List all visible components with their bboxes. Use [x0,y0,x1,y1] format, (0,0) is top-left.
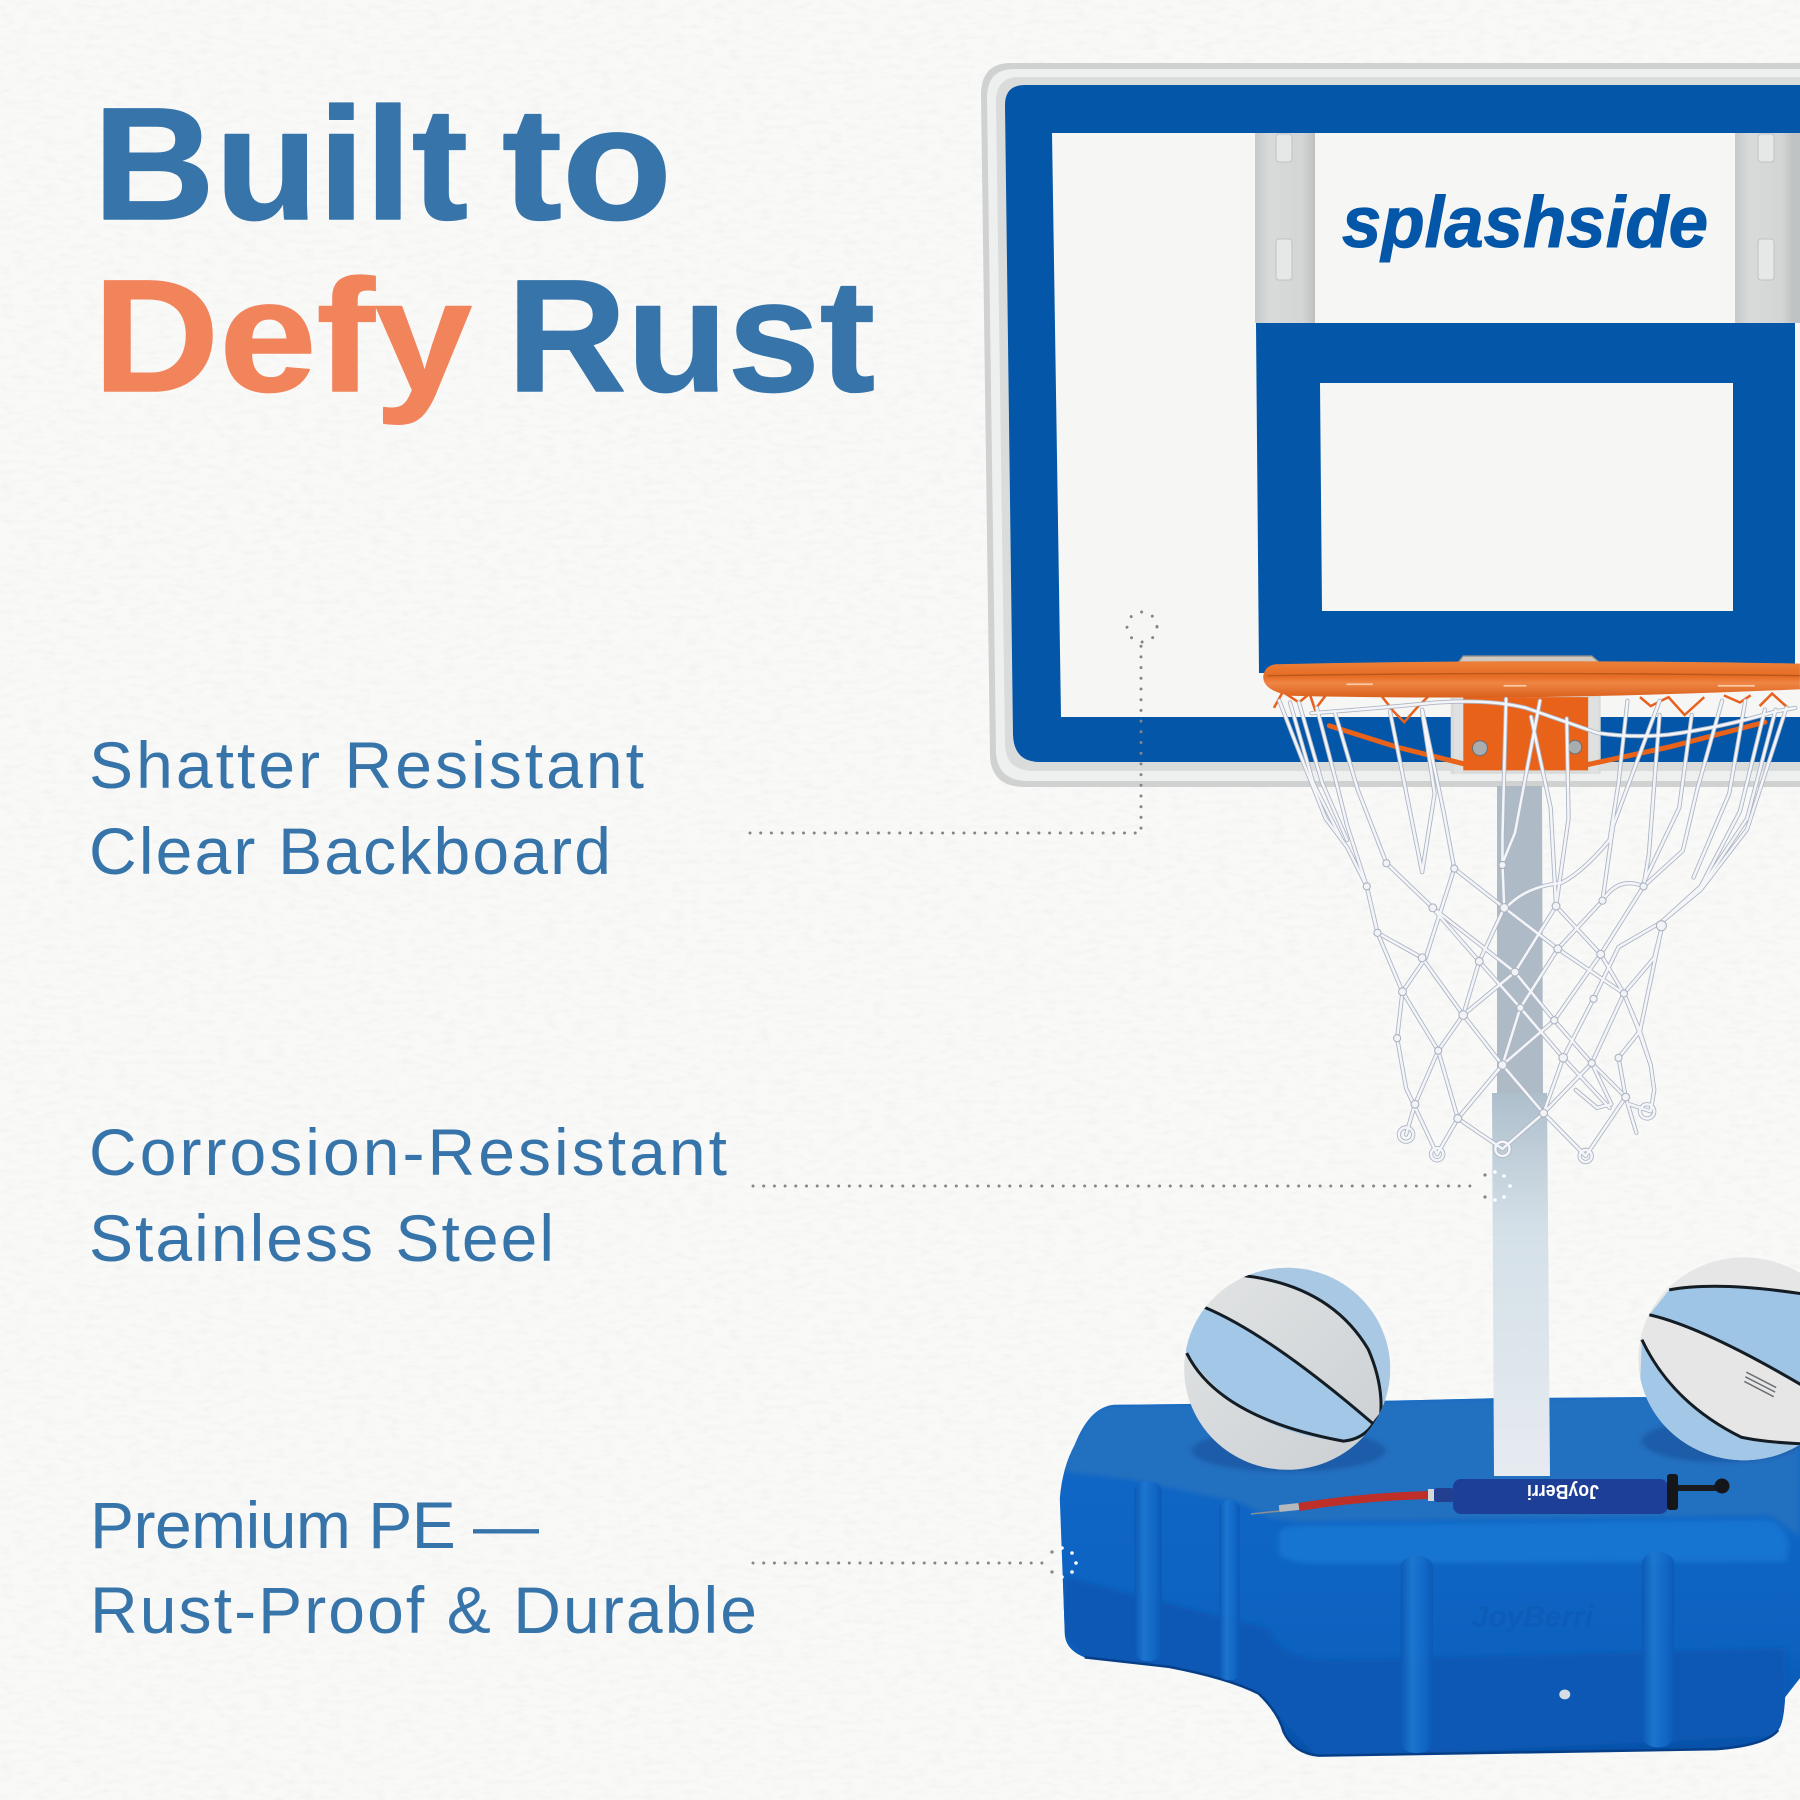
pump body [1453,1479,1668,1514]
pump brand text: JoyBerri [1527,1480,1599,1502]
needle and hose [1251,1511,1280,1514]
title line 2: Rust [507,246,875,425]
feature text: stainless steel [89,1115,727,1275]
rim and mounting hardware [1263,656,1800,774]
shooter square [1256,323,1795,673]
support post [1492,786,1550,1476]
embossed brand mark: JoyBerri [1472,1601,1594,1634]
clear panel [1052,133,1800,717]
callout leader: post [753,1170,1512,1202]
net [1279,699,1795,1162]
logo: splashside: splashside [1342,183,1708,263]
feature text: backboard: Clear Backboard [89,814,611,888]
title line 1: Built [93,74,468,253]
bottom shadow edge [1085,1657,1778,1756]
feature text: backboard [89,728,644,888]
right mounting bracket [1735,133,1800,323]
feature text: stainless steel: Corrosion-Resistant [89,1115,727,1189]
blue border [1005,85,1800,762]
feature text: premium PE [90,1488,757,1647]
base surface shading [1060,1396,1800,1759]
title line 2: Defy [93,246,472,425]
hoop ring [1263,661,1800,698]
backboard [981,63,1800,787]
backboard frame [981,63,1800,787]
right basketball [1637,1255,1800,1468]
drain plug [1559,1689,1570,1699]
feature text: premium PE: Premium PE — [90,1488,539,1562]
support braces [1329,722,1765,767]
title [93,74,875,425]
base silhouette [1060,1396,1800,1756]
net hooks [1274,692,1790,722]
title line 1 [93,74,672,253]
callout leader: base [753,1546,1078,1579]
mounting plate [1451,656,1601,774]
feature text: premium PE: Rust-Proof & Durable [90,1573,757,1647]
title line 2 [93,246,875,425]
title line 1: to [502,74,672,253]
left mounting bracket [1255,133,1315,323]
feature text: stainless steel: Stainless Steel [89,1201,554,1275]
callout leader: backboard [750,612,1157,833]
ribs [1134,1481,1674,1753]
feature text: backboard: Shatter Resistant [89,728,644,802]
water-fillable base [1060,1396,1800,1759]
left basketball [1179,1263,1398,1472]
air pump [1251,1474,1730,1514]
